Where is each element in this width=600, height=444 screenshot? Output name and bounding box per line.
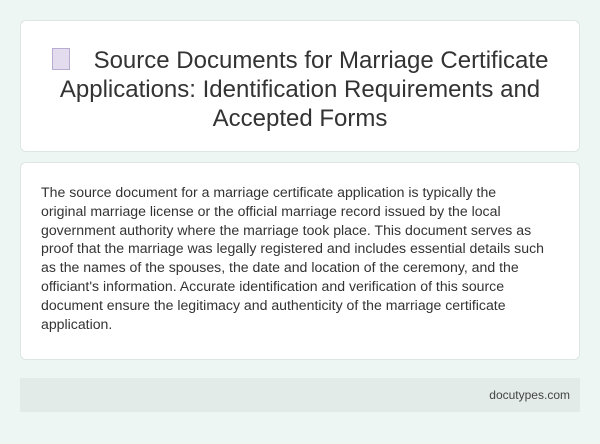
description text: document ensure the legitimacy and authenticity of the marriage certificate bbox=[41, 297, 506, 313]
icon: document bbox=[52, 48, 70, 70]
description text bbox=[41, 184, 544, 332]
description text: original marriage license or the official marriage record issued by the local bbox=[41, 203, 501, 219]
description text: officiant's information. Accurate identification and verification of this source bbox=[41, 278, 504, 294]
description text: The source document for a marriage certificate application is typically the bbox=[41, 184, 496, 200]
description text: application. bbox=[41, 316, 112, 332]
footer bar bbox=[20, 378, 580, 412]
footer text: docutypes.com bbox=[489, 388, 570, 402]
description card bbox=[20, 162, 580, 360]
title card bbox=[20, 20, 580, 152]
description text: proof that the marriage was legally registered and includes essential details such bbox=[41, 240, 544, 256]
description text: as the names of the spouses, the date and location of the ceremony, and the bbox=[41, 259, 519, 275]
description text: government authority where the marriage took place. This document serves as bbox=[41, 222, 531, 238]
title: Source Documents for Marriage Certificate Applications: Identification Requirements and Accepted Forms bbox=[60, 47, 548, 132]
